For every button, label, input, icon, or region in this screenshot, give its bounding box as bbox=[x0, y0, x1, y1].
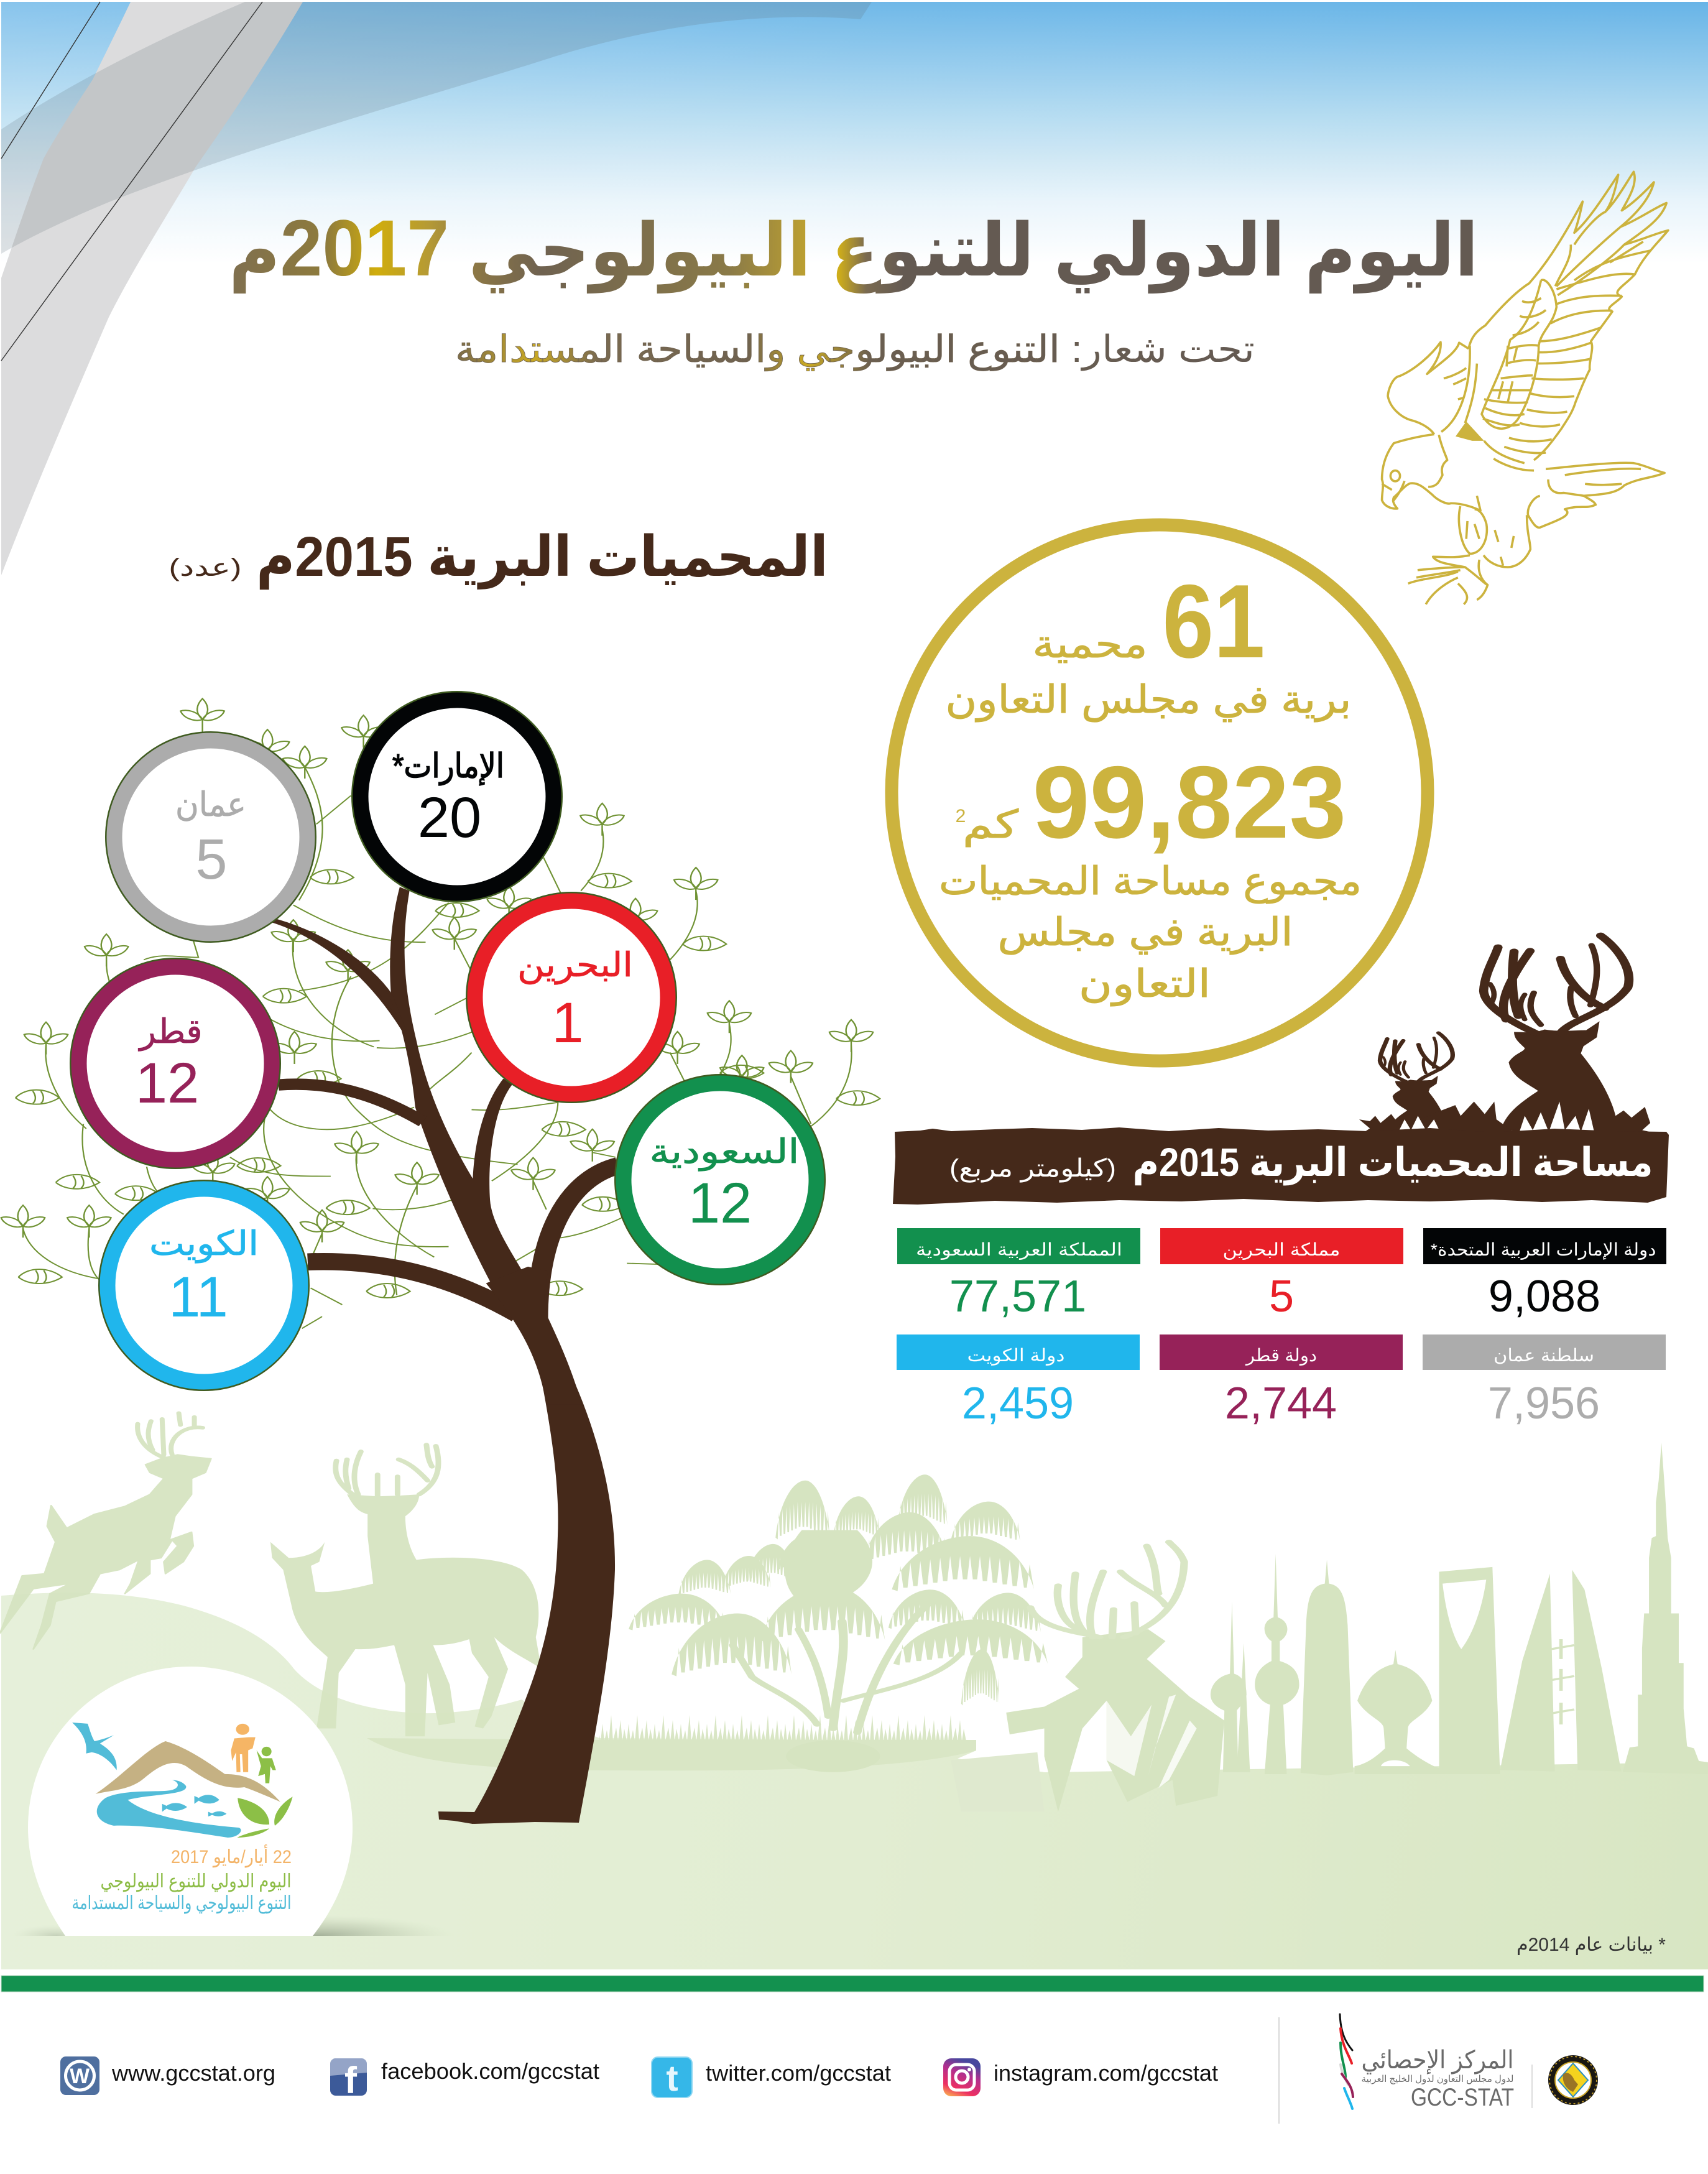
grass band bbox=[367, 1713, 976, 1770]
silhouette: jumping deer bbox=[0, 1413, 211, 1649]
circle: UAE: 20 bbox=[418, 786, 481, 849]
circle: Oman: 5 bbox=[195, 828, 228, 891]
sky background bbox=[1, 2, 1708, 263]
biodiversity day logo badge: اليوم الدولي للتنوع البيولوجي bbox=[101, 1871, 291, 1892]
circle: Oman: عمان bbox=[175, 786, 246, 823]
biodiversity day logo badge: 22 أيار/مايو 2017 bbox=[171, 1844, 292, 1867]
panel: GCC total callout circle bbox=[892, 525, 1428, 1061]
section heading: land reserves: المحميات البرية 2015م bbox=[256, 526, 828, 590]
silhouette: stag and doe bbox=[270, 1445, 542, 1736]
subtitle: تحت شعار: التنوع البيولوجي والسياحة المستدامة bbox=[455, 328, 1255, 371]
panel: GCC total callout circle: محمية bbox=[1032, 623, 1148, 666]
GCC-STAT logo bbox=[1340, 2014, 1532, 2111]
stat: Saudi Arabia: المملكة العربية السعودية bbox=[916, 1240, 1122, 1260]
circle: UAE bbox=[353, 692, 561, 901]
decorative grey swoosh bbox=[1, 2, 872, 575]
tree vines and leaves bbox=[1, 698, 880, 1328]
stat: Oman: سلطنة عمان bbox=[1493, 1346, 1594, 1365]
tree trunk bbox=[438, 1384, 615, 1824]
GCC-STAT logo: لدول مجلس التعاون لدول الخليج العربية bbox=[1362, 2074, 1513, 2084]
green footer bar bbox=[1, 1976, 1704, 1992]
icon: golden eagle bbox=[1382, 172, 1668, 604]
silhouette: palm trees bbox=[629, 1474, 1048, 1772]
stat: Kuwait: 2,459 bbox=[962, 1379, 1074, 1428]
stat: Bahrain bbox=[1160, 1228, 1403, 1321]
silhouette: brown deer pair with grass bbox=[1359, 936, 1666, 1136]
stat: Kuwait: دولة الكويت bbox=[967, 1346, 1064, 1366]
stat: Qatar: دولة قطر bbox=[1245, 1346, 1317, 1366]
logo ribbon bbox=[1340, 2014, 1353, 2109]
circle: Saudi Arabia: 12 bbox=[688, 1172, 752, 1235]
social: website bbox=[60, 2056, 275, 2095]
stat: Qatar bbox=[1160, 1334, 1403, 1428]
panel: GCC total callout circle: التعاون bbox=[1079, 963, 1211, 1006]
social: website: W bbox=[70, 2065, 90, 2088]
circle: Bahrain bbox=[467, 893, 676, 1102]
social: instagram: instagram.com/gccstat bbox=[994, 2060, 1218, 2086]
banner: area heading: (كيلومتر مربع) bbox=[949, 1155, 1116, 1183]
panel: GCC total callout circle: برية في مجلس التعاون bbox=[945, 678, 1352, 722]
stat: UAE: 9,088 bbox=[1489, 1272, 1600, 1321]
circle: Bahrain: البحرين bbox=[517, 946, 633, 984]
banner: area heading bbox=[893, 1127, 1669, 1205]
title: اليوم الدولي للتنوع البيولوجي 2017م bbox=[229, 204, 1479, 294]
biodiversity day logo badge bbox=[12, 1667, 454, 1957]
circle: Saudi Arabia bbox=[616, 1075, 824, 1284]
GCC emblem bbox=[1548, 2055, 1598, 2105]
circle: Qatar: 12 bbox=[136, 1052, 199, 1115]
social: twitter bbox=[652, 2057, 891, 2099]
panel: GCC total callout circle: البرية في مجلس bbox=[997, 911, 1293, 955]
stat: Bahrain: 5 bbox=[1269, 1272, 1294, 1321]
banner: area heading: مساحة المحميات البرية 2015م bbox=[1133, 1140, 1653, 1186]
stat: Saudi Arabia bbox=[897, 1228, 1140, 1321]
footer divider bbox=[1278, 2017, 1280, 2124]
circle: Qatar: قطر bbox=[137, 1013, 203, 1051]
social: instagram bbox=[943, 2058, 1218, 2096]
GCC-STAT logo: GCC-STAT bbox=[1411, 2084, 1514, 2111]
social: facebook bbox=[330, 2058, 599, 2101]
silhouette: stag head and grasses bbox=[951, 1542, 1224, 1812]
section heading: land reserves: (عدد) bbox=[169, 554, 241, 581]
stat: Kuwait bbox=[897, 1334, 1140, 1428]
social: facebook: facebook.com/gccstat bbox=[381, 2058, 599, 2084]
social: twitter: t bbox=[666, 2058, 678, 2099]
panel: GCC total callout circle: 2 bbox=[956, 806, 966, 826]
circle: Bahrain: 1 bbox=[552, 991, 584, 1055]
footnote: * بيانات عام 2014م bbox=[1516, 1935, 1666, 1955]
stat: Oman bbox=[1423, 1334, 1666, 1428]
circle: Kuwait bbox=[99, 1181, 308, 1390]
tree branches bbox=[272, 887, 618, 1405]
ground and hill bbox=[1, 1593, 1708, 1969]
panel: GCC total callout circle: 99,823 bbox=[1033, 745, 1346, 859]
silhouette: gulf skyline bbox=[1211, 1443, 1708, 1775]
panel: GCC total callout circle: كم bbox=[962, 803, 1019, 847]
social: twitter: twitter.com/gccstat bbox=[706, 2060, 891, 2086]
panel: GCC total callout circle: مجموع مساحة المحميات bbox=[939, 860, 1362, 904]
logo artwork bbox=[72, 1723, 293, 1838]
stat: UAE: دولة الإمارات العربية المتحدة* bbox=[1430, 1240, 1656, 1260]
GCC-STAT logo: المركز الإحصائي bbox=[1362, 2047, 1513, 2075]
circle: Saudi Arabia: السعودية bbox=[649, 1133, 800, 1171]
panel: GCC total callout circle: 61 bbox=[1163, 563, 1265, 680]
circle: Oman bbox=[106, 733, 315, 941]
biodiversity day logo badge: التنوع البيولوجي والسياحة المستدامة bbox=[72, 1893, 291, 1914]
stat: Qatar: 2,744 bbox=[1225, 1379, 1337, 1428]
stat: Oman: 7,956 bbox=[1488, 1379, 1600, 1428]
social: website: www.gccstat.org bbox=[111, 2060, 275, 2086]
stat: Bahrain: مملكة البحرين bbox=[1222, 1240, 1341, 1260]
circle: Kuwait: الكويت bbox=[149, 1225, 259, 1263]
circle: Qatar bbox=[71, 959, 280, 1168]
stat: UAE bbox=[1423, 1228, 1666, 1321]
social: facebook: f bbox=[344, 2060, 358, 2101]
circle: UAE: الإمارات* bbox=[392, 747, 504, 785]
circle: Kuwait: 11 bbox=[168, 1265, 228, 1329]
stat: Saudi Arabia: 77,571 bbox=[949, 1272, 1086, 1321]
